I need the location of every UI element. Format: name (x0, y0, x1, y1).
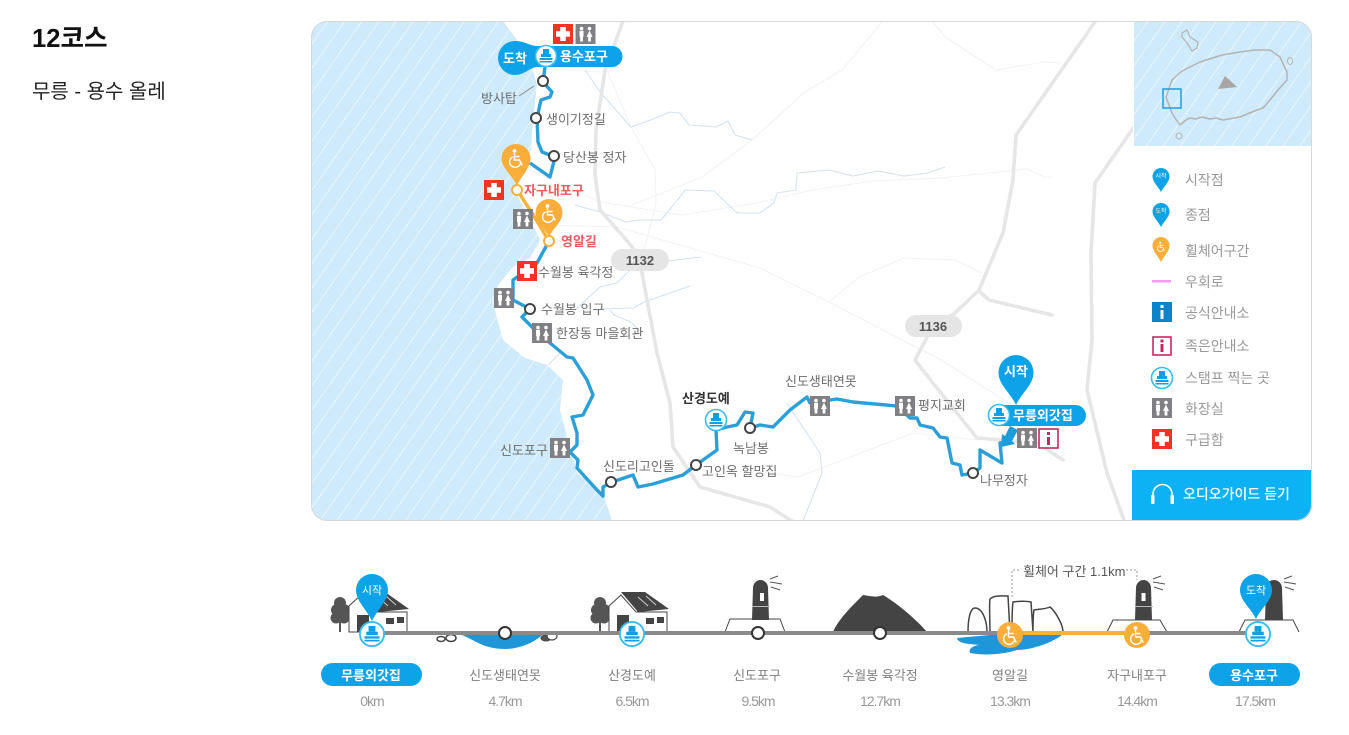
waypoint: 신도리고인돌: 신도리고인돌 (603, 459, 675, 474)
land features: thin roads (530, 22, 1062, 477)
legend: start: 시작 (1155, 173, 1167, 180)
illustration: house 2 (590, 592, 669, 632)
illustration: volcano (833, 595, 927, 632)
waypoint: 한장동 마을회관: 한장동 마을회관 (556, 326, 643, 341)
start pin (998, 355, 1034, 405)
end marker: 용수포구: 도착 (503, 51, 527, 66)
waypoint: 산경도예: 산경도예 (682, 391, 730, 406)
land features: streams (548, 70, 945, 521)
legend: start (1152, 168, 1224, 192)
icon: toilet (494, 288, 514, 308)
sea (311, 21, 612, 521)
stop 1: 무릉외갓집: 무릉외갓집 (341, 668, 401, 683)
legend: stamp: 스탬프 찍는 곳 (1185, 370, 1270, 386)
illustration: house 1 (330, 592, 409, 632)
legend: detour (1152, 274, 1224, 290)
arrow: route direction (1001, 426, 1018, 447)
elevation strip (321, 564, 1300, 709)
stop 8: 용수포구: 17.5km (1235, 693, 1275, 709)
wheelchair pin: 자구내포구 (502, 144, 584, 198)
legend: toilet (1152, 398, 1224, 418)
audio guide button (1132, 470, 1313, 521)
stop 1: 무릉외갓집: 0km (360, 693, 384, 709)
waypoint: 수월봉 입구 (524, 303, 604, 316)
stop 1: 무릉외갓집 (321, 574, 422, 709)
waypoint: 나무정자: 나무정자 (980, 473, 1028, 488)
legend: first aid (1152, 429, 1224, 449)
wheelchair section line (1010, 631, 1137, 635)
waypoint: 평지교회 (895, 396, 966, 416)
illustration: rocks and sea (957, 596, 1063, 654)
stop 2: 신도생태연못: 4.7km (488, 693, 522, 709)
stop 3: 산경도예: 산경도예 (608, 668, 656, 683)
legend: official info: 공식안내소 (1185, 305, 1250, 321)
stop 2: 신도생태연못 (469, 627, 541, 709)
trail line (372, 631, 1258, 635)
waypoint: 녹남봉 (733, 423, 769, 456)
panel: route map (311, 21, 1313, 523)
legend: wheelchair (1152, 237, 1250, 262)
audio guide button: 오디오가이드 듣기 (1183, 486, 1290, 502)
inset locator map (1134, 21, 1313, 146)
stop 5: 수월봉 육각정: 수월봉 육각정 (842, 668, 918, 683)
stop 8: 용수포구 (1209, 574, 1300, 709)
panel: legend background (1133, 125, 1134, 132)
waypoint: 신도생태연못 (785, 374, 857, 416)
stop 1: 무릉외갓집: 시작 (362, 584, 382, 597)
legend: start: 시작점 (1185, 172, 1224, 188)
waypoint: 산경도예 (682, 391, 730, 430)
road badge 1136: 1136 (919, 319, 947, 334)
waypoint: 방사탑: 방사탑 (481, 91, 517, 106)
waypoint: 신도포구: 신도포구 (500, 443, 548, 458)
stop 6: 영알길: 영알길 (992, 668, 1028, 683)
waypoint: 생이기정길: 생이기정길 (546, 112, 606, 127)
waypoint: 신도생태연못: 신도생태연못 (785, 374, 857, 389)
waypoint: 수월봉 육각정 (517, 261, 613, 281)
icon: toilet (513, 209, 533, 229)
legend: small info: 족은안내소 (1185, 338, 1250, 354)
waypoint: 수월봉 입구: 수월봉 입구 (541, 302, 604, 317)
stop 5: 수월봉 육각정 (842, 627, 918, 709)
stop 3: 산경도예 (608, 622, 656, 709)
waypoint: 신도포구 (500, 438, 570, 458)
stop 4: 신도포구: 9.5km (741, 693, 775, 709)
legend: detour: 우회로 (1185, 274, 1224, 290)
stop 7: 자구내포구 (1107, 622, 1167, 709)
waypoint: 신도리고인돌 (603, 459, 675, 487)
legend: official info (1152, 302, 1250, 322)
waypoint: 녹남봉: 녹남봉 (733, 441, 769, 456)
end marker: 용수포구 (498, 41, 622, 75)
legend: stamp (1152, 368, 1270, 388)
road badge 1132: 1132 (626, 253, 654, 268)
stop 6: 영알길: 13.3km (990, 693, 1030, 709)
stop 8: 용수포구: 도착 (1246, 584, 1266, 597)
illustration: lighthouse 3 (1239, 576, 1299, 632)
route: wheelchair section (518, 194, 548, 237)
waypoint: 나무정자 (968, 468, 1028, 488)
title: 12코스 (32, 25, 108, 53)
stop 3: 산경도예: 6.5km (615, 693, 649, 709)
legend: small info (1153, 337, 1250, 355)
stop 2: 신도생태연못: 신도생태연못 (469, 668, 541, 683)
icon: toilet (1017, 428, 1037, 448)
icon: first aid (484, 180, 504, 200)
wheelchair pin: 자구내포구: 자구내포구 (524, 183, 584, 198)
stop 8: 용수포구: 용수포구 (1230, 668, 1278, 683)
stop 7: 자구내포구: 자구내포구 (1107, 668, 1167, 683)
legend: toilet: 화장실 (1185, 401, 1224, 417)
legend (1152, 168, 1270, 449)
waypoint: 평지교회: 평지교회 (918, 398, 966, 413)
legend: end: 종점 (1185, 207, 1211, 223)
illustration: lighthouse 1 (725, 576, 785, 632)
waypoint: 고인옥 할망집: 고인옥 할망집 (702, 464, 777, 479)
waypoint: 당산봉 정자: 당산봉 정자 (563, 150, 626, 165)
icon: info (1039, 429, 1058, 448)
land features: main roads (595, 21, 1134, 523)
illustration: pond (437, 632, 557, 649)
legend: end: 도착 (1155, 207, 1167, 215)
route: blue line (513, 67, 1010, 496)
stop 4: 신도포구: 신도포구 (733, 668, 781, 683)
waypoint: 수월봉 육각정: 수월봉 육각정 (538, 265, 613, 280)
stop 7: 자구내포구: 14.4km (1117, 693, 1157, 709)
stop 5: 수월봉 육각정: 12.7km (860, 693, 900, 709)
subtitle: 무릉 - 용수 올레 (32, 80, 166, 103)
start marker: 무릉외갓집: 무릉외갓집 (1013, 408, 1073, 423)
road badge 1132 (611, 249, 669, 271)
waypoint: 한장동 마을회관 (532, 323, 643, 343)
waypoint: 방사탑 (481, 76, 548, 106)
end marker: 용수포구: 용수포구 (560, 49, 608, 64)
waypoint: 고인옥 할망집 (691, 460, 777, 479)
wheelchair pin: 영알길 (536, 199, 597, 249)
start pin: 시작 (1004, 364, 1028, 379)
icon: toilet (576, 24, 596, 44)
start marker: 무릉외갓집 (988, 404, 1086, 426)
stop 4: 신도포구 (733, 627, 781, 709)
wheelchair section callout: 휠체어 구간 1.1km (1023, 564, 1125, 579)
legend: end (1152, 203, 1211, 227)
legend: first aid: 구급함 (1185, 432, 1224, 448)
stop 6: 영알길 (990, 622, 1030, 709)
road badge 1136 (905, 315, 962, 337)
icon: first aid (553, 24, 573, 44)
legend: wheelchair: 휠체어구간 (1185, 243, 1250, 259)
wheelchair pin: 영알길: 영알길 (561, 234, 597, 249)
illustration: lighthouse 2 (1107, 576, 1167, 632)
wheelchair section callout (1012, 564, 1137, 597)
